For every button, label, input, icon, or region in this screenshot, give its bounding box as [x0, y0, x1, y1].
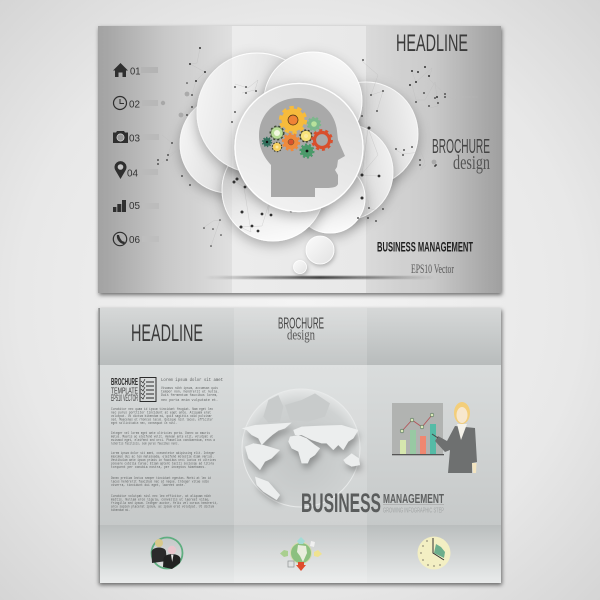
faint back-side continents	[263, 393, 330, 423]
body text column: Duis fermentum faucibus lorem,	[161, 393, 218, 397]
body text column: viverra, tincidunt dui eget, laoreet ante.	[111, 483, 185, 487]
heading: BUSINESS MANAGEMENT: BUSINESS	[301, 488, 381, 518]
brochure template badge: TEMPLATE	[111, 386, 138, 396]
item 06 phone: 06	[129, 234, 140, 246]
heading: BUSINESS MANAGEMENT: GROWING INFOGRAPHIC STEP	[383, 506, 444, 514]
body text column: Vestibulum ante ipsum primis in faucibus orci luctus et ultrices	[111, 458, 216, 462]
body text column: metus. Mauris ac eleifend velit. Aenean ante elit, volutpat ut	[111, 434, 213, 438]
body text column: Curabitur nec quam id ipsum tincidunt feugiat. Nam eget leo	[111, 407, 213, 411]
body text column: mattis. Nullam eros ligula, convallis ut laoreet vitae,	[111, 498, 210, 502]
subheading: business management: BUSINESS MANAGEMENT	[377, 240, 473, 254]
body text column: euismod eget, eleifend sed orci. Phasellus condimentum, eros a	[111, 438, 215, 442]
heading: BROCHURE design: design	[287, 328, 316, 344]
brochure template badge: EPS10 VECTOR	[111, 393, 138, 403]
top brochure: BROCHURE	[432, 135, 490, 158]
item 02 clock	[114, 96, 165, 110]
ground shadow line	[205, 276, 435, 279]
head silhouette	[259, 98, 345, 197]
item 03 camera: 03	[129, 132, 140, 144]
checklist icon	[140, 378, 156, 402]
paper circles cluster	[180, 52, 418, 241]
body text column: Lorem ipsum dolor sit amet, consectetur adipiscing elit. Integer	[111, 451, 215, 455]
body text column: Lorem ipsum dolor sit amet	[161, 378, 223, 383]
presenter with bar chart	[392, 402, 477, 473]
heading: BROCHURE design	[278, 316, 324, 344]
icon: clock	[418, 536, 450, 570]
item 05 bars	[113, 200, 159, 212]
globe with world map	[242, 389, 360, 507]
thought bubbles	[294, 236, 334, 274]
brochure sheet: front	[98, 26, 501, 293]
continents	[242, 423, 360, 500]
heading: BROCHURE design: BROCHURE	[278, 316, 324, 332]
brochure template badge	[111, 377, 156, 403]
body text column: tempor non, hendrerit et nulla.	[161, 390, 219, 394]
body text column: volutpat. Ut dictum bibendum mi, quis sagittis odio pulvinar	[111, 414, 212, 418]
body text column: lacus hendrerit faucibus nec at neque. Integer vitae odio	[111, 480, 209, 484]
icon: business people	[152, 538, 182, 569]
heading: HEADLINE: HEADLINE	[396, 30, 468, 57]
top brochure	[98, 26, 501, 293]
body text column: nec porta enim vulputate et.	[161, 398, 218, 402]
body text column: Donec pretium lectus semper tincidunt egestas. Morbi at leo id	[111, 476, 211, 480]
heading: BUSINESS MANAGEMENT: MANAGEMENT	[383, 492, 444, 506]
caption: EPS10 Vector: EPS10 Vector	[411, 261, 454, 276]
item 05 bars: 05	[129, 200, 140, 212]
bottom brochure	[98, 308, 501, 583]
heading: HEADLINE: HEADLINE	[131, 320, 203, 347]
item 04 pin: 04	[127, 168, 138, 180]
bar chart board	[392, 403, 444, 455]
body text column: sed. Maecenas et rhoncus lacus. Quisque nisl lacus, efficitur	[111, 418, 213, 422]
body text column: bibendum mi.	[111, 508, 130, 512]
item 02 clock: 02	[129, 98, 140, 110]
gears	[263, 108, 332, 157]
body text column: maximus dui ac leo malesuada, eleifend molestie diam varius.	[111, 454, 214, 458]
item 06 phone	[113, 232, 159, 246]
fold tint over the side panels	[98, 26, 501, 293]
body text column: fringilla sed ipsum. Integer auctor, felis vel cursus hendrerit,	[111, 501, 218, 505]
body text column: lobortis facilisis, sem purus faucibus nunc.	[111, 442, 179, 446]
heading: design: design	[453, 152, 490, 174]
item 01 home	[113, 63, 158, 78]
item 01 home: 01	[130, 66, 141, 78]
molecular network dots	[157, 47, 478, 247]
body text column	[111, 378, 223, 512]
body text column: eget sollicitudin nec, consequat in nisl.	[111, 421, 177, 425]
body text column: torquent per conubia nostra, per inceptos himenaeos.	[111, 465, 206, 469]
brochure template badge: BROCHURE	[111, 377, 138, 388]
body text column: arcu sapien placerat ipsum, ac ipsum erat volutpat. Ut dictum	[111, 504, 214, 508]
left icon list	[113, 63, 165, 246]
item 04 pin	[115, 161, 158, 180]
brochure sheet: back	[98, 308, 501, 583]
body text column: posuere cubilia Curae; Etiam aptent taciti sociosqu ad litora	[111, 462, 214, 466]
body text column: nec purus porttitor tincidunt at eget ante. Aliquam erat	[111, 410, 211, 414]
center disc with head	[235, 84, 363, 212]
body text column: Vivamus nibh ipsum, accumsan quis	[161, 386, 218, 390]
presenter figure	[432, 402, 477, 473]
icon: globe arrows	[280, 537, 322, 571]
body text column: Curabitur volutpat nisl nec leo efficitur, at aliquam nibh	[111, 494, 211, 498]
item 03 camera	[113, 131, 159, 144]
body text column: Integer vel lorem eget ante ultricies porta. Donec ac mauris	[111, 431, 210, 435]
